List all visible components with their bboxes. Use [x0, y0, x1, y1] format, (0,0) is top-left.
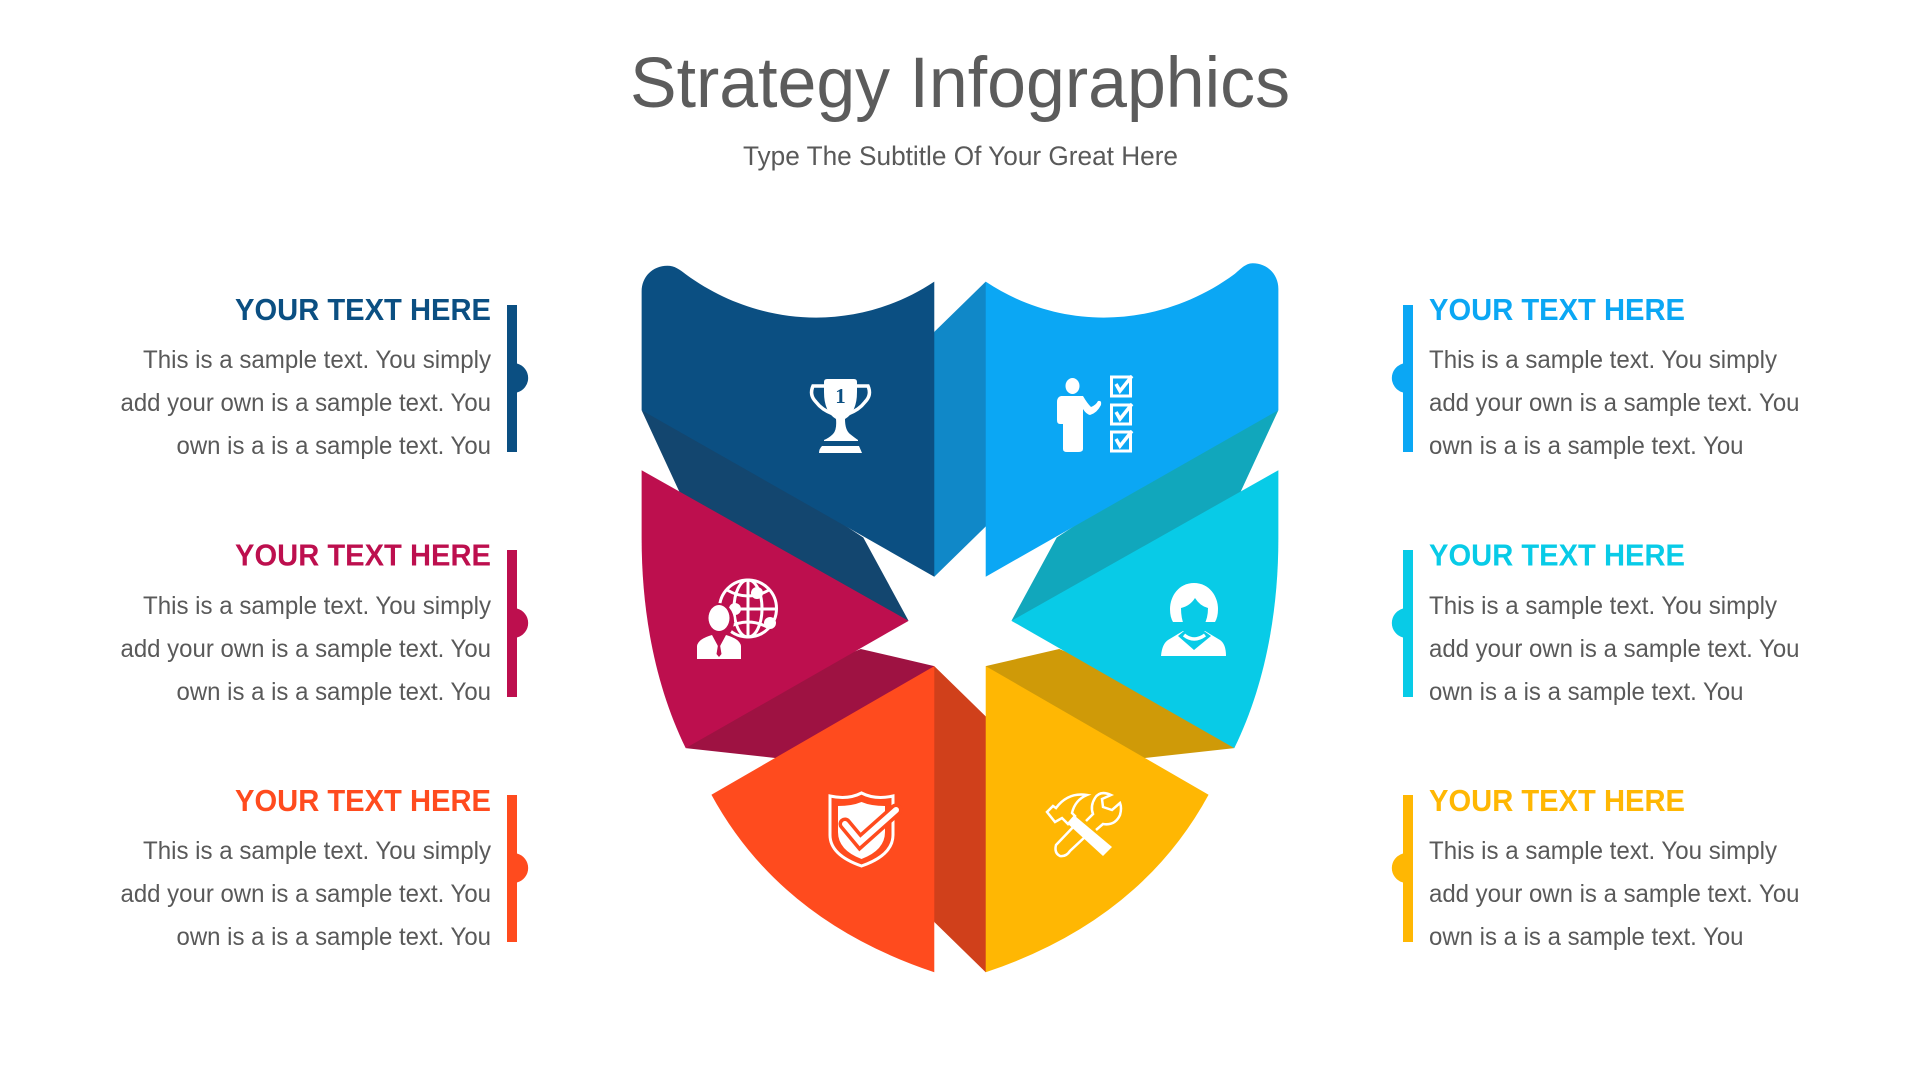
body text: navy: own is a is a sample text. You: [176, 432, 491, 460]
icon: hammer and wrench: [1047, 793, 1121, 856]
body text: cyan: own is a is a sample text. You: [1429, 678, 1744, 706]
body text: navy: add your own is a sample text. You: [120, 389, 491, 417]
fold: sky blue to cyan: [1011, 410, 1278, 621]
segment: orange: [711, 666, 934, 972]
segment: crimson: [642, 470, 909, 748]
marker: sky blue: [1392, 305, 1413, 452]
body text: sky blue: This is a sample text. You simply: [1429, 346, 1777, 374]
body text: orange: This is a sample text. You simply: [143, 837, 491, 865]
marker: navy: [507, 305, 528, 452]
body text: orange: [120, 837, 491, 951]
body text: cyan: [1429, 592, 1800, 706]
heading: sky blue: YOUR TEXT HERE: [1429, 292, 1685, 327]
panel: crimson text block: [120, 538, 528, 706]
body text: navy: [120, 346, 491, 460]
heading: cyan: YOUR TEXT HERE: [1429, 538, 1685, 572]
body text: crimson: own is a is a sample text. You: [176, 678, 491, 706]
body text: sky blue: add your own is a sample text. You: [1429, 389, 1800, 417]
marker: cyan: [1392, 550, 1413, 697]
body text: gold: add your own is a sample text. You: [1429, 880, 1800, 908]
segment: sky blue: [986, 263, 1278, 577]
fold: navy to crimson: [642, 410, 909, 621]
heading: gold: YOUR TEXT HERE: [1429, 783, 1685, 818]
marker: gold: [1392, 795, 1413, 942]
body text: crimson: add your own is a sample text. You: [120, 635, 491, 663]
panel: cyan text block: [1392, 538, 1800, 706]
title: Strategy Infographics: [630, 44, 1290, 123]
marker: crimson: [507, 550, 528, 697]
fold: gold to cyan: [986, 649, 1234, 759]
segment: cyan: [1011, 470, 1278, 748]
body text: cyan: add your own is a sample text. You: [1429, 635, 1800, 663]
panel: orange text block: [120, 783, 528, 951]
body text: crimson: [120, 592, 491, 706]
icon: trophy: 1: [835, 384, 846, 408]
icon: globe with businessman: [697, 580, 776, 660]
heading: navy: YOUR TEXT HERE: [235, 292, 491, 327]
heading: orange: YOUR TEXT HERE: [235, 783, 491, 818]
panel: sky blue text block: [1392, 292, 1800, 460]
icon: shield with check: [830, 793, 896, 866]
marker: orange: [507, 795, 528, 942]
body text: navy: This is a sample text. You simply: [143, 346, 491, 374]
heading: crimson: YOUR TEXT HERE: [235, 538, 491, 572]
segment: navy: [642, 266, 934, 577]
central shield diagram: [642, 263, 1278, 972]
body text: orange: own is a is a sample text. You: [176, 923, 491, 951]
body text: crimson: This is a sample text. You simply: [143, 592, 491, 620]
body text: cyan: This is a sample text. You simply: [1429, 592, 1777, 620]
body text: orange: add your own is a sample text. You: [120, 880, 491, 908]
body text: gold: own is a is a sample text. You: [1429, 923, 1744, 951]
fold: top centre: [931, 282, 989, 577]
subtitle: Type The Subtitle Of Your Great Here: [743, 141, 1178, 171]
icon: woman: [1161, 583, 1226, 656]
fold: crimson to orange: [686, 649, 934, 759]
segment: gold: [986, 666, 1209, 972]
body text: sky blue: [1429, 346, 1800, 460]
panel: gold text block: [1392, 783, 1800, 951]
icon: person with checklist: [1057, 376, 1132, 452]
fold: bottom centre: [931, 666, 989, 972]
body text: gold: This is a sample text. You simply: [1429, 837, 1777, 865]
body text: sky blue: own is a is a sample text. You: [1429, 432, 1744, 460]
panel: navy text block: [120, 292, 528, 460]
body text: gold: [1429, 837, 1800, 951]
icon: trophy: [812, 379, 869, 453]
